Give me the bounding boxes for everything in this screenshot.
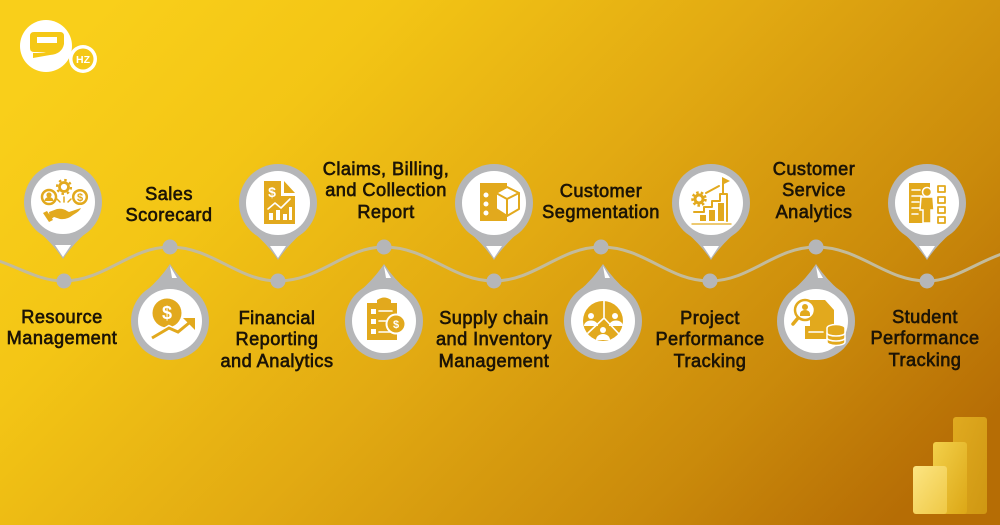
label: Sales xyxy=(145,184,193,204)
item 6: Customer Segmentation xyxy=(542,181,660,360)
pin: resource icon: $ xyxy=(77,192,83,204)
label: Scorecard xyxy=(126,205,212,225)
pin: customer data search icon xyxy=(777,264,855,360)
pin: sales icon xyxy=(131,264,209,360)
pin: report icon: $ xyxy=(268,184,276,200)
pin: sales icon: $ xyxy=(162,303,172,323)
label: Management xyxy=(439,351,549,371)
logo: 9 HZ: HZ xyxy=(76,54,91,66)
label: Resource xyxy=(21,307,103,327)
item 3: Financial Reporting and Analytics xyxy=(220,164,334,371)
item 8: Customer Service Analytics xyxy=(773,159,855,360)
label: Report xyxy=(357,202,415,222)
logo: 9 HZ xyxy=(20,20,97,73)
label: Performance xyxy=(870,328,980,348)
pin: checklist icon: $ xyxy=(393,319,399,331)
label: Performance xyxy=(655,329,765,349)
label: Project xyxy=(680,308,740,328)
pin: growth icon xyxy=(672,164,750,260)
icon: Power BI logo xyxy=(913,417,987,514)
pin: report icon xyxy=(239,164,317,260)
label: and Inventory xyxy=(436,329,552,349)
pin: segmented pie icon xyxy=(564,264,642,360)
label: Customer xyxy=(560,181,642,201)
item 7: Project Performance Tracking xyxy=(655,164,765,371)
pin: checklist icon xyxy=(345,264,423,360)
wavy timeline xyxy=(0,240,1000,288)
label: Tracking xyxy=(889,350,961,370)
label: Analytics xyxy=(776,202,852,222)
item 4: Claims, Billing, and Collection Report xyxy=(323,159,449,360)
pin: resource icon xyxy=(24,163,102,259)
pin: box icon xyxy=(455,164,533,260)
pin: student checklist icon xyxy=(888,164,966,260)
label: and Analytics xyxy=(220,351,334,371)
label: and Collection xyxy=(325,180,447,200)
label: Student xyxy=(892,307,958,327)
label: Reporting xyxy=(236,329,318,349)
item 9: Student Performance Tracking xyxy=(870,164,980,370)
label: Segmentation xyxy=(542,202,660,222)
label: Tracking xyxy=(674,351,746,371)
label: Customer xyxy=(773,159,855,179)
item 5: Supply chain and Inventory Management xyxy=(436,164,552,371)
label: Management xyxy=(7,328,117,348)
label: Supply chain xyxy=(439,308,549,328)
label: Financial xyxy=(239,308,315,328)
label: Service xyxy=(782,180,846,200)
timeline nodes xyxy=(56,240,934,288)
label: Claims, Billing, xyxy=(323,159,449,179)
item 1: Resource Management xyxy=(7,163,117,348)
item 2: Sales Scorecard xyxy=(126,184,212,360)
